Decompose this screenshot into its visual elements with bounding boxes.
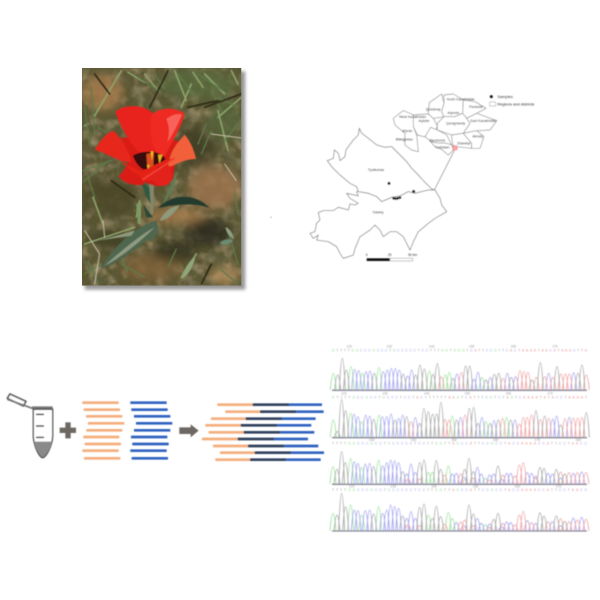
chromatogram trace 4: TTTTGGCCCGCCTGCCCCCTCCTTGGTTAGCCATTCCGCCTACCAAAACCATTCCTAACC [332, 488, 588, 492]
blue primer bars [130, 403, 172, 458]
photo: red tulip in the field [82, 68, 245, 290]
region labels: Turkistan [435, 145, 449, 149]
legend: Samples [497, 94, 513, 99]
region labels: Atyrau [402, 129, 412, 133]
chromatogram trace 2: 150 [465, 392, 470, 396]
chromatogram trace 4: 150 [473, 485, 479, 489]
region labels: North Kazakhstan [447, 97, 475, 101]
chromatogram trace 1: 130 [387, 344, 392, 348]
chromatogram trace 4: 170 [556, 485, 562, 489]
amplified fragments [202, 405, 324, 460]
chromatogram trace 4: 130 [391, 485, 396, 489]
region labels: Almaty [472, 134, 483, 138]
chromatogram trace 3: 170 [535, 438, 540, 442]
region labels: Aqtobe [418, 119, 430, 123]
chromatogram trace 1: 160 [511, 344, 516, 348]
chromatogram trace 1: 170 [552, 344, 558, 348]
chromatogram trace 4: 120 [349, 485, 355, 489]
region labels: East Kazakhstan [470, 119, 496, 123]
tulip stem and leaves [98, 171, 234, 279]
tulip flower [95, 106, 196, 187]
chromatogram trace 2: 120 [341, 392, 347, 396]
inset connector line [434, 149, 455, 190]
chromatogram trace 2: 160 [506, 392, 511, 396]
region labels: Qyzylorda [429, 138, 445, 142]
region labels: Zhambyl [457, 142, 471, 146]
workflow: tube plus primers gives amplified fragments [7, 394, 324, 460]
chromatogram trace 2 [330, 392, 589, 438]
chromatogram trace 4: 140 [431, 485, 437, 489]
map: sample locations in Turkistan districts [310, 94, 534, 261]
chromatogram trace 3: 150 [451, 438, 457, 442]
inset highlighted study area [453, 146, 457, 150]
icon: plus sign [60, 422, 76, 438]
chromatogram trace 1: 140 [429, 344, 435, 348]
region labels: West Kazakhstan [399, 115, 426, 119]
chromatogram trace 3: TTTTGGCCCGCCTGCCCCCTCCTTGGTTAGCCATTCCGCCTACCAAAACCATTCCTAACC [332, 441, 588, 445]
scale bar: 50 km [408, 253, 417, 257]
region labels: Pavlodar [469, 105, 484, 109]
sample dots [387, 182, 415, 200]
region labels: Tyulkubas [368, 168, 384, 172]
district outlines: Tyulkubas and Tolebiy [310, 128, 447, 258]
chromatogram trace 4 [330, 485, 589, 531]
region labels: Mangystau [396, 137, 413, 141]
regions of Kazakhstan outlines [393, 94, 497, 155]
region labels: Aqmola [447, 111, 459, 115]
chromatogram trace 2: 140 [424, 392, 430, 396]
region labels: Qaraghandy [446, 122, 465, 126]
chromatogram trace 2: 170 [547, 392, 553, 396]
chromatogram trace 4: 160 [515, 485, 520, 489]
chromatogram trace 2: 130 [382, 392, 388, 396]
region labels [368, 97, 496, 215]
legend [490, 94, 534, 106]
chromatogram trace 3: 180 [576, 438, 581, 442]
scale bar: 0 [366, 253, 368, 257]
chromatogram trace 3: 140 [411, 438, 416, 442]
orange primer bars [82, 403, 124, 458]
region labels: Tolebiy [372, 211, 384, 215]
chromatogram trace 1: 120 [347, 344, 352, 348]
chromatogram trace 3: 160 [493, 438, 499, 442]
faint mark between photo and map [270, 216, 272, 218]
chromatogram trace 1 [330, 344, 589, 390]
scale bar: 25 [388, 253, 392, 257]
legend: Regions and districts [497, 101, 534, 106]
chromatograms [330, 344, 589, 531]
chromatogram trace 3 [330, 438, 589, 484]
arrow [179, 424, 199, 437]
chromatogram trace 1: 150 [469, 344, 475, 348]
chromatogram trace 3: 130 [369, 438, 375, 442]
chromatogram trace 1: GTTTTGGCCCGCCCTGCCCCCTCCTTTGGTGGGTCATTCCGTTCACTAAAATAACATAAACTTA [332, 348, 588, 352]
region labels: Qostanay [426, 107, 441, 111]
chromatogram trace 2: GTTTTGCCGCCTGCCCTCCTACTTTTTTAAGTCATTTCGTCTAGTCAAAATATACCTAAAAT [332, 396, 587, 400]
scale bar [366, 253, 417, 261]
icon: microcentrifuge tube [7, 394, 53, 458]
